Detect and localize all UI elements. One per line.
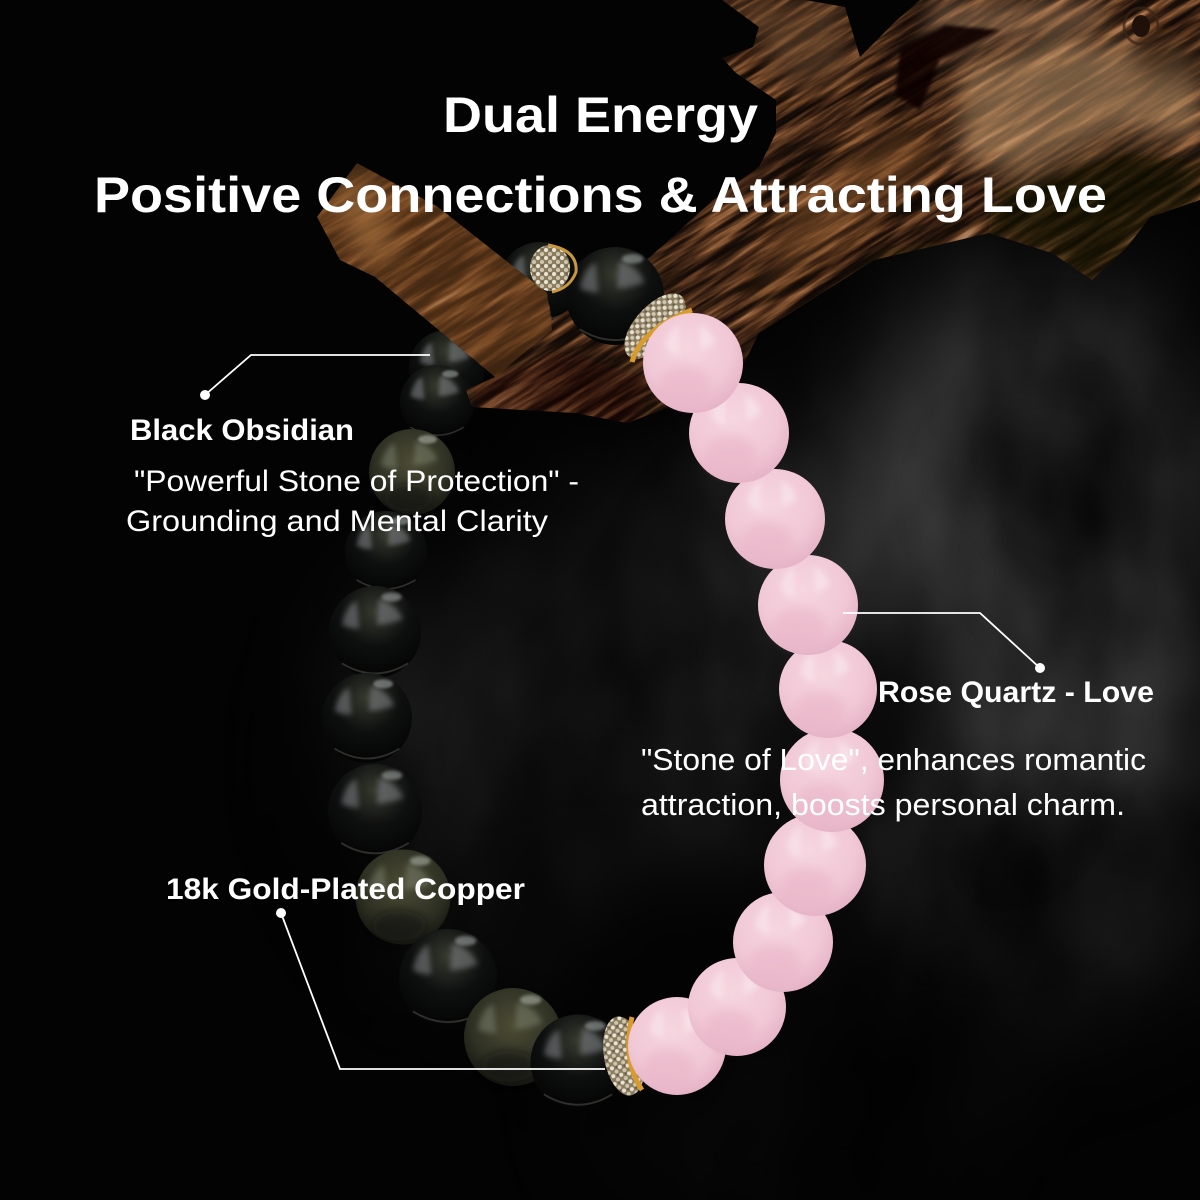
driftwood branch — [317, 0, 1200, 423]
callout: Rose Quartz: "Stone of Love", enhances romantic — [641, 742, 1146, 777]
callout: 18k Gold-Plated Copper: 18k Gold-Plated Copper — [166, 873, 525, 906]
gold spacer top — [613, 283, 697, 369]
wood grain texture — [317, 0, 1200, 423]
callout: 18k Gold-Plated Copper — [166, 873, 605, 1069]
gold spacer top small — [530, 245, 576, 292]
background smoke — [347, 236, 1200, 1004]
gold spacer bottom — [597, 1013, 651, 1099]
callout: Rose Quartz — [641, 613, 1154, 822]
callout: Black Obsidian: "Powerful Stone of Protection" - — [134, 465, 579, 498]
callout: Black Obsidian — [126, 355, 579, 538]
knot — [1124, 8, 1158, 44]
wood light and shadow — [330, 0, 1200, 425]
title: Positive Connections & Attracting Love — [94, 167, 1107, 223]
beads behind the branch — [400, 242, 581, 439]
bracelet: rose quartz beads — [628, 313, 884, 1095]
title: Dual Energy — [443, 87, 758, 143]
callout: Rose Quartz: Rose Quartz - Love — [878, 676, 1154, 709]
left limb tint — [317, 163, 552, 377]
title — [94, 87, 1107, 223]
dark crevice — [895, 25, 1000, 110]
callout: Black Obsidian: Grounding and Mental Clarity — [126, 505, 548, 538]
bracelet: black obsidian beads — [322, 247, 664, 1110]
callout: Rose Quartz: attraction, boosts personal charm. — [641, 787, 1125, 822]
callout: Black Obsidian: Black Obsidian — [130, 414, 354, 447]
